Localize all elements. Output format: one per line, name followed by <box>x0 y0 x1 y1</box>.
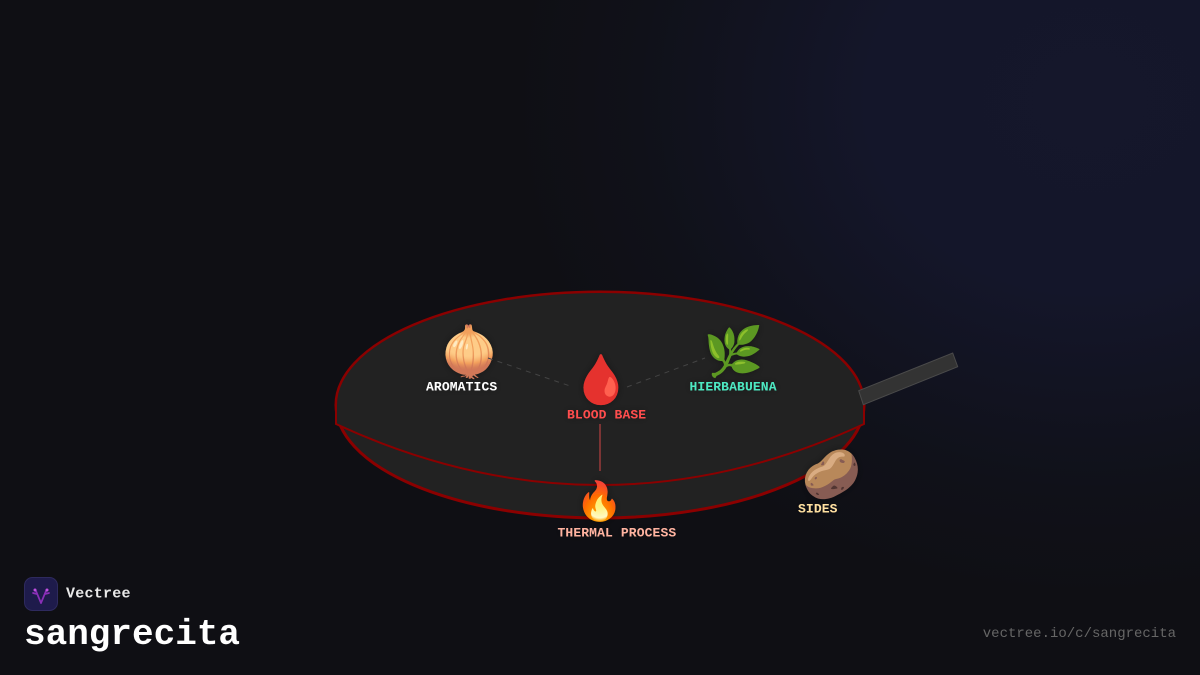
label: blood base: BLOOD BASE <box>567 408 646 422</box>
connector: blood base to thermal process <box>599 424 601 471</box>
logo mark <box>33 588 49 603</box>
icon: flame: 🔥 <box>576 479 623 524</box>
node: aromatics <box>426 323 499 394</box>
node: blood base <box>567 351 646 422</box>
pan base <box>336 292 864 518</box>
icon: onion: 🧅 <box>440 323 499 380</box>
label: sides: SIDES <box>798 502 838 516</box>
pan handle <box>859 353 958 405</box>
label: hierbabuena: HIERBABUENA <box>690 380 777 394</box>
label: thermal process: THERMAL PROCESS <box>558 526 676 540</box>
brand logo <box>24 578 58 610</box>
brand name: Vectree <box>66 586 131 602</box>
title: sangrecita <box>24 614 240 655</box>
icon: potato: 🥔 <box>802 446 861 502</box>
icon: blood drop: 🩸 <box>571 351 631 408</box>
node: hierbabuena <box>690 323 777 394</box>
node: thermal process <box>558 479 676 540</box>
icon: herb: 🌿 <box>704 323 763 380</box>
label: aromatics: AROMATICS <box>426 380 497 394</box>
pan rim <box>336 292 864 485</box>
node: sides <box>798 446 861 516</box>
connector: aromatics to blood base <box>488 358 573 387</box>
pan <box>336 292 958 518</box>
source url: vectree.io/c/sangrecita <box>983 626 1176 642</box>
logo tile <box>24 578 58 610</box>
connector: hierbabuena to blood base <box>627 358 705 387</box>
